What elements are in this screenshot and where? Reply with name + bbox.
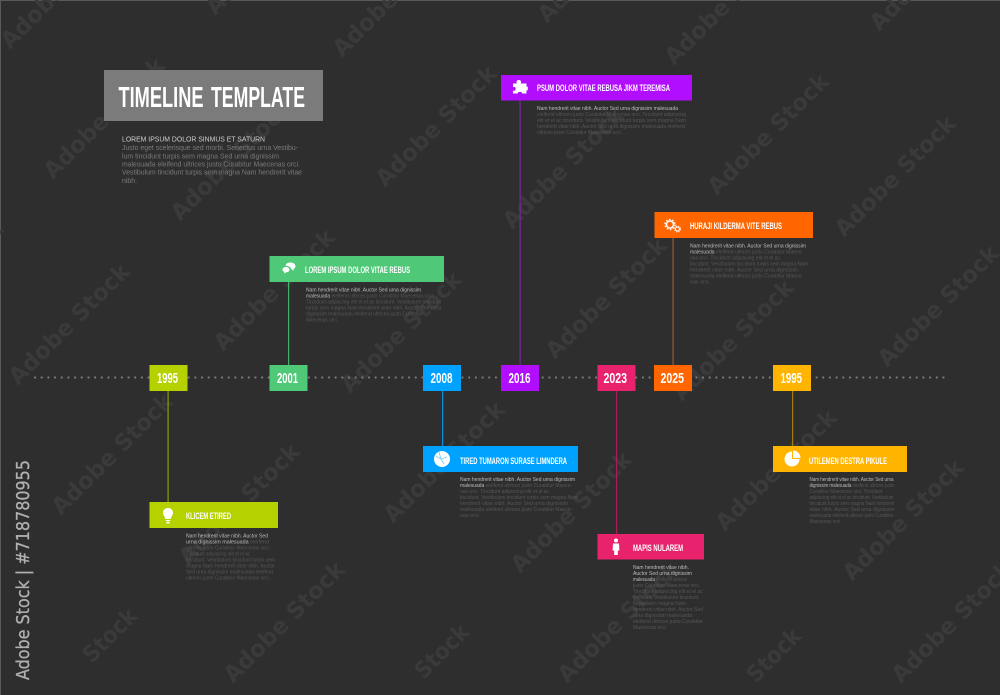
body text: malesuada eleifend ultrices justo Curabitur Maece- [460,507,572,513]
intro text [122,134,302,185]
body text: Sed urna dignissim malesuada eleifend [186,570,273,576]
heading: TIRED TUMARON SURASE LIMNDERA [460,456,567,467]
intro text: lum tincidunt turpis sem magna Sed urna dignissim [122,151,279,160]
icon: light bulb [163,508,173,524]
body text: eleifend ultrices justo Curabitur Maecenas orci. Tincidunt adipiscing [537,112,686,118]
icon: gears [665,220,680,232]
year marker [598,365,636,391]
body text: hendrerit vitae nibh. Auctor Sed [633,607,703,613]
year marker [501,365,539,391]
year: 2025 [660,370,684,387]
body text: nas orci. Tincidunt adipiscing elit et el ac [460,489,549,495]
watermark pattern: Adobe Stock [219,556,351,688]
heading bar [150,502,278,528]
watermark pattern: Adobe Stock [209,224,341,356]
body text: tincidunt. Vestibulum tincidunt turpis sem magna Nam [460,495,579,501]
body text: tincidunt. Vestibulum tincidunt turpis sem [186,558,276,564]
title: TIMELINE [118,82,204,114]
watermark pattern: Stock [410,619,475,684]
event: 2023 pink [598,365,704,631]
watermark pattern: Adobe Stock [174,438,306,570]
body text [186,534,276,582]
body text: malesuada eleifend ultrices justo Curabitur Maecenas orci. [306,294,434,300]
body text: Nam hendrerit vitae nibh. Auctor Sed urna dignissim [306,288,422,294]
body text: nas orci. [690,280,710,286]
body text: malesuada eleifend ultrices [633,577,687,583]
heading bar [423,446,578,472]
year: 2023 [604,370,627,387]
body text: vitae nibh. Auctor Sed urna dignissim [810,507,895,513]
body text: Nam hendrerit vitae nibh. Auctor Sed urna dignissim [690,244,807,250]
body text: Tincidunt adipiscing elit et el ac tincidunt. Vestibulum tincidunt [306,300,441,306]
intro text: Vestibulum tincidunt turpis sem magna Nam hendrerit vitae [122,168,302,177]
body text: malesuada eleifend ultrices justo Curabitur Maece- [460,483,572,489]
heading bar [501,75,692,100]
watermark pattern: Adobe Stock [553,556,685,688]
body text: Maecenas orci. [306,318,338,324]
watermark pattern: Adobe Stock [541,232,673,364]
event: 2025 orange [654,212,813,391]
year marker [150,365,188,391]
watermark pattern: Adobe Stock [166,94,298,226]
body text: adipiscing elit et el ac tincidunt. Vestibulum [810,495,894,501]
body text: Nam hendrerit vitae nibh. Auctor Sed urna [810,477,894,483]
heading: PSUM DOLOR VITAE REBUSA JIKM TEREMISA [537,83,670,94]
year: 1995 [780,370,802,387]
body text: magna Nam hendrerit vitae nibh. Auctor [186,564,275,570]
watermark pattern: Stock [78,603,143,668]
year: 2001 [277,370,298,387]
heading: KLICEM ETIRED [186,511,231,522]
year marker [423,365,461,391]
body text: tincidunt. Vestibulum tincidunt [633,595,698,601]
body text: Nam hendrerit vitae nibh. Auctor Sed urna dignissim malesuada [537,106,678,112]
heading: HURAJI KILDERMA VITE REBUS [690,221,782,232]
heading: LOREM IPSUM DOLOR VITAE REBUS [305,265,410,276]
body text: tincidunt. Vestibulum tincidunt turpis sem magna Nam [690,262,809,268]
intro text: Justo eget scelerisque sed morbi. Senectus urna Vestibu- [122,143,298,152]
connector [792,391,793,446]
event: 1995 lime [150,365,278,582]
stock id label: Adobe Stock | #718780955 [13,460,34,680]
intro text: malesuada eleifend ultrices justo Curabitur Maecenas orci. [122,160,300,168]
year: 2016 [508,370,530,387]
watermark pattern: Adobe Stock [498,102,630,234]
body text: turpis sem magna Nam hendrerit vitae nibh. Auctor Sed urna [306,306,441,312]
body text: urna dignissim malesuada eleifend [186,540,269,546]
event: 2008 blue [423,365,579,519]
heading bar [773,446,907,472]
body text: Tincidunt adipiscing elit et el ac [186,552,250,558]
watermark pattern: Stock [742,623,807,688]
title: TEMPLATE [211,82,305,114]
body text: dignissim malesuada eleifend ultrices justo [810,483,895,489]
icon: person [613,538,619,555]
heading: UTILEMEN DESTRA PIKULE [809,456,887,467]
body text: urna dignissim malesuada [633,613,692,619]
watermark pattern: Adobe Stock [838,454,970,586]
watermark pattern: Adobe Stock [668,274,800,406]
body text: malesuada eleifend ultrices justo Curabitur [810,513,894,519]
watermark pattern: Adobe Stock [47,388,179,520]
body text: ultrices justo Curabitur Maecenas orci. [186,546,270,552]
body text: Curabitur Maecenas orci. Tincidunt [810,489,883,495]
body text: ultrices justo Curabitur Maecenas orci. [186,576,270,582]
connector [168,391,169,502]
body text [810,477,895,525]
body text: Maecenas orci. [633,625,667,631]
watermark pattern: Adobe Stock [4,258,136,390]
body text [306,288,441,324]
body text: justo Curabitur Maecenas orci. [632,583,700,589]
connector [672,238,674,365]
watermark pattern: Adobe Stock [711,404,843,536]
event: 1995 yellow [773,365,907,525]
body text [537,106,687,136]
icon: pie chart [785,450,800,467]
heading: MAPIS NULAREM [633,543,683,554]
icon: puzzle piece [513,80,528,94]
body text [460,477,579,519]
event: 2016 purple [501,75,692,391]
icon: speech bubbles [282,262,296,274]
connector [520,100,521,365]
body text: tincidunt turpis sem magna Nam hendrerit [810,501,895,507]
body text: nas orci. [460,513,480,519]
watermark pattern: Adobe Stock [39,52,171,184]
title block [104,70,323,185]
year marker [773,365,811,391]
timeline axis [35,376,950,379]
connector [616,391,617,534]
year marker [654,365,692,391]
heading bar [270,256,444,282]
title banner [104,70,323,121]
body text: turpis sem magna Nam [633,601,687,607]
watermark pattern: Adobe Stock [336,266,468,398]
icon: globe [434,451,450,467]
watermark pattern: Adobe Stock [830,110,962,242]
connector [442,391,443,446]
body text: malesuada eleifend ultrices justo Curabitur Maece- [690,250,803,256]
watermark pattern: Adobe Stock [703,68,835,200]
body text: dignissim malesuada eleifend ultrices justo Curabitur [306,312,423,318]
body text: Maecenas orci. [810,519,842,525]
watermark pattern: Adobe Stock [506,446,638,578]
year: 2008 [430,370,452,387]
body text: hendrerit vitae nibh. Auctor Sed urna dignissim malesuada eleifend [537,124,685,130]
body text: elit et el ac tincidunt. Vestibulum tincidunt turpis sem magna Nam [537,118,687,124]
body text: nas orci. Tincidunt adipiscing elit et el ac [690,256,780,262]
watermark pattern: Adobe Stock [379,396,511,528]
heading bar [654,212,813,238]
body text: hendrerit vitae nibh. Auctor Sed urna dignissim [690,268,799,274]
body text: Nam hendrerit vitae nibh. Auctor Sed [186,534,268,540]
year: 1995 [157,370,178,387]
body text: hendrerit vitae nibh. Auctor Sed urna dignissim [460,501,569,507]
body text [690,244,809,286]
connector [288,282,289,365]
body text: eleifend ultrices justo Curabitur [633,619,703,625]
body text: ultrices justo Curabitur Maecenas orci. [537,130,622,136]
body text: Auctor Sed urna dignissim [633,571,693,577]
watermark pattern: Adobe Stock [371,60,503,192]
intro text: LOREM IPSUM DOLOR SINMUS ET SATURN [122,134,265,144]
body text [632,565,703,631]
year marker [270,365,308,391]
event: 2001 green [270,256,444,391]
body text: Nam hendrerit vitae nibh. [633,565,689,571]
intro text: nibh. [122,176,137,185]
body text: malesuada eleifend ultrices justo Curabitur Maece- [690,274,803,280]
body text: Nam hendrerit vitae nibh. Auctor Sed urna dignissim [460,477,576,483]
heading bar [598,534,704,560]
body text: Tincidunt adipiscing elit et el ac [633,589,703,595]
